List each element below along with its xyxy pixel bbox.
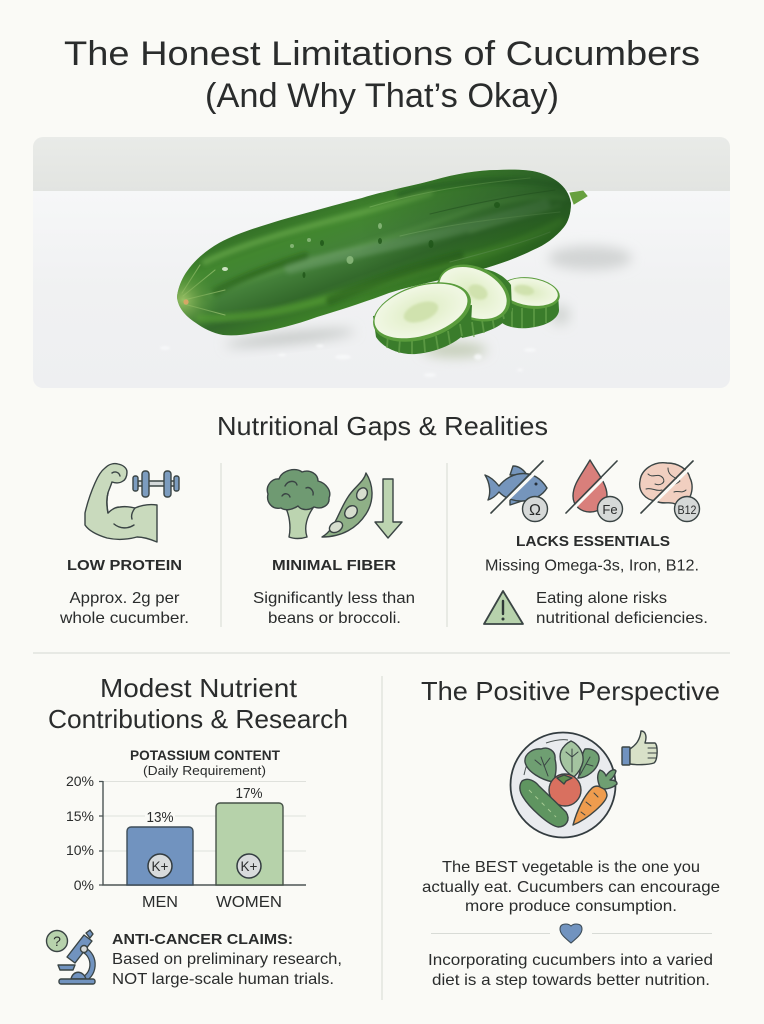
text: anti-cancer claims: Based on preliminary research, xyxy=(112,951,342,968)
text: best vegetable: actually eat. Cucumbers can encourage xyxy=(422,879,720,896)
icon: thumbs up xyxy=(622,731,657,765)
panel: low protein xyxy=(59,464,189,627)
text: deficiency warning xyxy=(536,590,708,627)
chart title: (Daily Requirement) xyxy=(143,763,266,778)
text: minimal fiber detail: beans or broccoli. xyxy=(268,610,401,627)
photo: cucumber with slices xyxy=(33,137,730,388)
icon: vegetable plate xyxy=(510,732,617,838)
icon: flexed arm xyxy=(85,464,157,542)
tomato xyxy=(549,774,581,806)
text: deficiency warning: nutritional deficiencies. xyxy=(536,610,708,627)
text: varied diet: diet is a step towards better nutrition. xyxy=(432,972,710,989)
icon: blood drop crossed xyxy=(566,460,622,522)
carrot xyxy=(573,786,607,825)
bar: women 17%: 17% xyxy=(236,785,262,802)
text: varied diet: Incorporating cucumbers into a varied xyxy=(428,952,713,969)
icon: heart xyxy=(560,924,582,943)
title xyxy=(64,35,700,115)
text: deficiency warning: Eating alone risks xyxy=(536,590,667,607)
panel: lacks essentials xyxy=(484,460,708,627)
bar: women 17%: K+ xyxy=(241,859,258,874)
leaves xyxy=(525,748,556,782)
y axis labels: 0% xyxy=(74,877,94,893)
heading: nutritional gaps: Nutritional Gaps & Realities xyxy=(217,411,548,441)
text: minimal fiber detail: Significantly less than xyxy=(253,590,415,607)
icon: warning triangle xyxy=(484,591,523,624)
heading: positive perspective: The Positive Perspective xyxy=(421,676,720,706)
icon: blood drop crossed: Fe xyxy=(602,502,618,517)
cucumber xyxy=(520,779,568,827)
text: minimal fiber detail xyxy=(253,590,415,627)
panel: anti-cancer claims xyxy=(46,930,342,988)
icon: brain crossed: B12 xyxy=(678,503,697,517)
label: minimal fiber: MINIMAL FIBER xyxy=(272,557,396,574)
icon: brain crossed xyxy=(640,461,700,522)
icon: down arrow xyxy=(375,479,402,538)
heading: modest nutrient contributions xyxy=(48,673,348,734)
text: varied diet xyxy=(428,952,713,989)
text: best vegetable: The BEST vegetable is the one you xyxy=(442,859,700,876)
y axis labels xyxy=(66,773,94,893)
icon: pea pod xyxy=(322,473,372,537)
icon: microscope with question mark: ? xyxy=(53,933,61,949)
text: low protein detail: whole cucumber. xyxy=(59,610,189,627)
bar: men 13% xyxy=(127,809,193,911)
chart: potassium content xyxy=(66,748,306,911)
y axis labels: 15% xyxy=(66,808,94,824)
chart title xyxy=(130,748,281,778)
text: best vegetable: more produce consumption. xyxy=(465,898,677,915)
label: low protein: LOW PROTEIN xyxy=(67,557,182,574)
heading: modest nutrient contributions: Contributions & Research xyxy=(48,704,348,734)
text: best vegetable xyxy=(422,859,720,915)
front slice xyxy=(373,305,472,354)
text: anti-cancer claims xyxy=(112,931,342,988)
bar: men 13%: K+ xyxy=(152,859,169,874)
panel: positive perspective xyxy=(422,731,720,989)
icon: microscope with question mark xyxy=(46,930,95,984)
icon: broccoli xyxy=(267,470,330,538)
text: low protein detail: Approx. 2g per xyxy=(70,590,180,607)
text: anti-cancer claims: NOT large-scale human trials. xyxy=(112,971,334,988)
y axis labels: 20% xyxy=(66,773,94,789)
back slice xyxy=(502,300,559,328)
bar: women 17%: WOMEN xyxy=(216,894,282,911)
divider lines xyxy=(33,463,730,1000)
text: anti-cancer claims: ANTI-CANCER CLAIMS: xyxy=(112,931,293,948)
icon: fish crossed xyxy=(485,461,548,522)
bar: men 13%: MEN xyxy=(142,894,178,911)
bar: men 13%: 13% xyxy=(146,809,174,826)
label: lacks essentials: LACKS ESSENTIALS xyxy=(516,533,670,550)
text: low protein detail xyxy=(59,590,189,627)
icon: fish crossed: Ω xyxy=(529,502,541,519)
icon: dumbbell xyxy=(133,471,179,497)
title: The Honest Limitations of Cucumbers xyxy=(64,35,700,73)
text: missing nutrients: Missing Omega-3s, Iron, B12. xyxy=(485,558,699,574)
heading: modest nutrient contributions: Modest Nutrient xyxy=(100,673,298,703)
y axis labels: 10% xyxy=(66,842,94,858)
middle slice xyxy=(436,268,512,338)
title: (And Why That’s Okay) xyxy=(205,77,559,115)
panel: minimal fiber xyxy=(253,470,415,627)
chart title: POTASSIUM CONTENT xyxy=(130,748,281,763)
bar: women 17% xyxy=(216,785,283,911)
